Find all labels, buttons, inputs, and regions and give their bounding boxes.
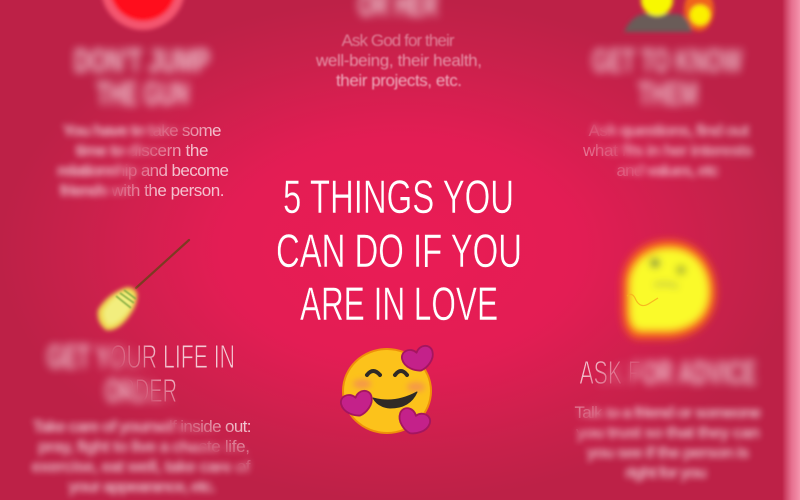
icon: broom xyxy=(98,240,189,330)
panel: get your life in order: your appearance, etc. xyxy=(68,477,216,496)
panel: pray for them xyxy=(315,0,482,90)
icon: heart left xyxy=(339,389,375,419)
icon: thinking face xyxy=(622,240,716,339)
panel: don't jump the gun: THE GUN xyxy=(96,75,190,112)
panel: get to know them: and values, etc xyxy=(616,161,720,180)
panel: pray for them: well-being, their health, xyxy=(315,51,482,70)
right edge strip xyxy=(782,0,800,500)
panel: don't jump the gun: relationship and become xyxy=(57,161,229,180)
panel: ask for advice: Talk to a friend or someone xyxy=(574,403,762,422)
panel: get your life in order: exercise, eat well, take care of xyxy=(32,457,251,476)
panel: get your life in order: your appearance, etc. xyxy=(68,477,216,496)
title xyxy=(276,170,522,330)
panel: don't jump the gun: time to discern the xyxy=(76,141,208,160)
icon: heart bottom xyxy=(395,406,432,438)
panel: don't jump the gun: You have to take some xyxy=(62,121,222,140)
panel: get your life in order: exercise, eat well, take care of xyxy=(32,457,251,476)
panel: ask for advice: you see if the person is xyxy=(586,443,750,462)
panel: get your life in order: pray, fight to live a chaste life, xyxy=(38,437,250,456)
panel: get your life in order: GET YOUR LIFE IN xyxy=(47,338,235,375)
panel: get your life in order: Take care of yourself inside out: xyxy=(32,417,252,436)
panel: get to know them: what fits in her interests xyxy=(582,141,753,160)
panel: ask for advice: right for you xyxy=(625,463,707,482)
panel: get your life in order: Take care of yourself inside out: xyxy=(32,417,252,436)
panel: don't jump the gun: time to discern the xyxy=(76,141,208,160)
panel: get your life in order: ORDER xyxy=(105,372,177,409)
panel: ask for advice: Talk to a friend or someone xyxy=(574,403,762,422)
panel: don't jump the gun: You have to take some xyxy=(62,121,222,140)
title: 5 THINGS YOU xyxy=(283,170,514,223)
panel: get your life in order: pray, fight to live a chaste life, xyxy=(38,437,250,456)
panel: don't jump the gun: DON'T JUMP xyxy=(74,42,210,79)
panel: get to know them: Ask questions, find out xyxy=(588,121,750,140)
panel: don't jump the gun: relationship and become xyxy=(57,161,229,180)
panel: get to know them xyxy=(582,42,753,180)
icon: heart top right xyxy=(400,344,436,374)
panel: get your life in order: ORDER xyxy=(105,372,177,409)
panel: ask for advice xyxy=(574,354,762,482)
panel: ask for advice: you trust so that they can xyxy=(576,423,760,442)
panel: get to know them: THEM xyxy=(638,75,698,112)
title: CAN DO IF YOU xyxy=(276,224,522,277)
icon: people talking xyxy=(624,0,714,32)
panel: get your life in order: GET YOUR LIFE IN xyxy=(47,338,235,375)
panel: pray for them: Ask God for their xyxy=(342,31,455,50)
panel: get to know them: and values, etc xyxy=(616,161,720,180)
panel: don't jump the gun: friends with the person. xyxy=(60,181,224,200)
panel: ask for advice: you trust so that they can xyxy=(576,423,760,442)
icon: smiling face with hearts xyxy=(339,344,436,438)
panel: pray for them: their projects, etc. xyxy=(336,71,462,90)
panel: get to know them: Ask questions, find out xyxy=(588,121,750,140)
icon: stop sign xyxy=(101,0,185,30)
title: ARE IN LOVE xyxy=(300,277,498,330)
panel: ask for advice: you see if the person is xyxy=(586,443,750,462)
panel: get your life in order xyxy=(32,338,252,496)
panel: don't jump the gun: friends with the person. xyxy=(60,181,224,200)
panel: ask for advice: right for you xyxy=(625,463,707,482)
panel: don't jump the gun xyxy=(57,42,229,200)
panel: get to know them: what fits in her interests xyxy=(582,141,753,160)
